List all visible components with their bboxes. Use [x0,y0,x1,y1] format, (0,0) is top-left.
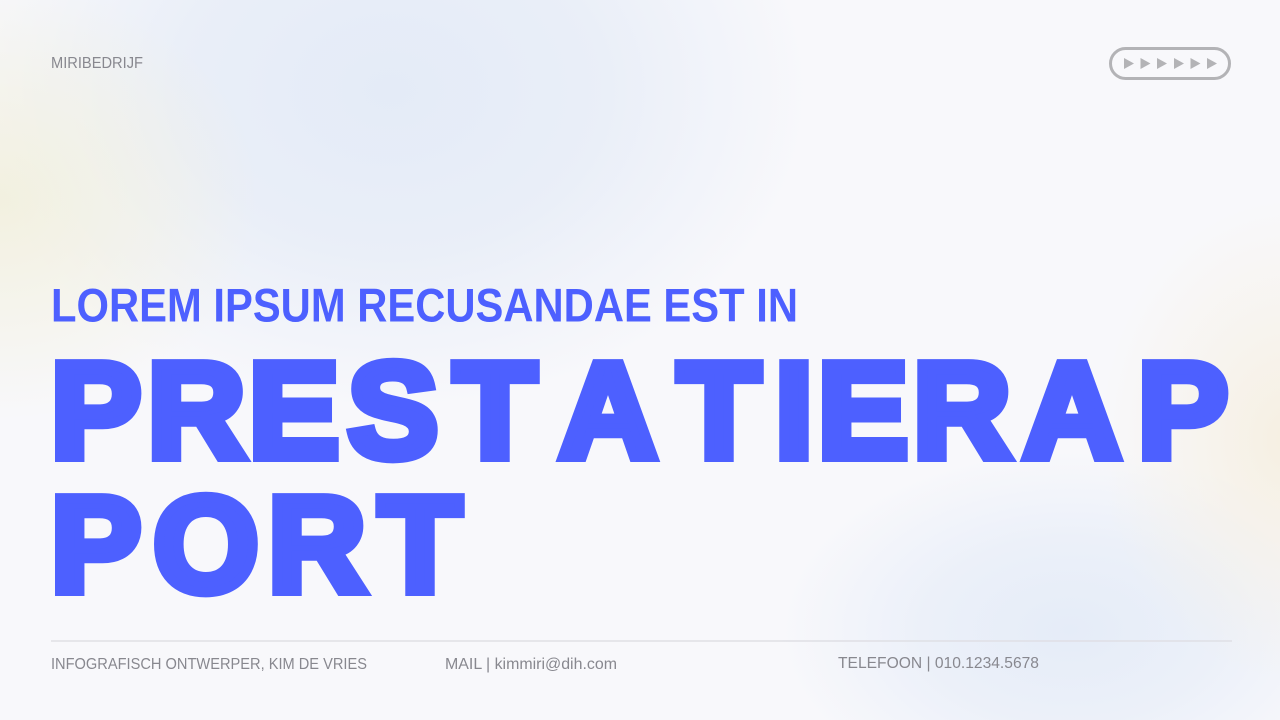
title line 2: PORT [51,469,461,620]
subtitle: LOREM IPSUM RECUSANDAE EST IN [51,278,798,332]
footer: phone: TELEFOON | 010.1234.5678 [838,655,1039,672]
company name: MIRIBEDRIJF [51,55,143,72]
footer: designer: INFOGRAFISCH ONTWERPER, KIM DE VRIES [51,656,367,673]
icon: arrows pill badge [1110,48,1230,78]
title line 1: PRESTATIERAP [51,335,1228,486]
footer: mail: MAIL | kimmiri@dih.com [445,656,617,673]
